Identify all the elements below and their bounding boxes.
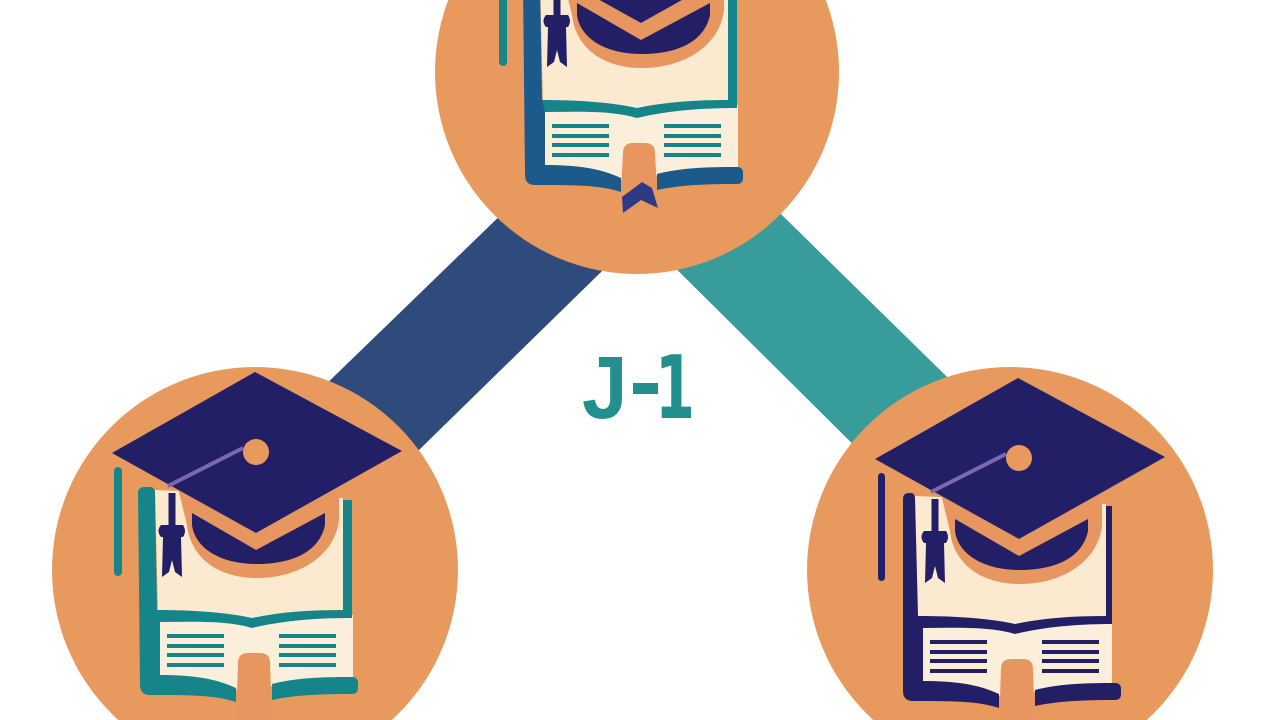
icon: open book — [523, 0, 743, 192]
icon: bookmark ribbon — [621, 143, 658, 213]
icon: side stroke — [878, 473, 885, 581]
icon: graduation cap — [497, 0, 787, 68]
icon: open book — [138, 487, 358, 702]
node: top circle with book and cap icon — [435, 0, 839, 274]
icon: bookmark ribbon — [236, 653, 272, 720]
node: left circle with book and cap icon — [52, 367, 458, 720]
icon: side stroke — [114, 467, 122, 576]
node: right circle with book and cap icon — [807, 367, 1213, 720]
connector: blue band to left circle — [287, 175, 642, 491]
icon: side stroke — [499, 0, 507, 66]
icon: open book — [903, 493, 1121, 708]
icon: graduation cap — [112, 372, 402, 578]
icon: graduation cap — [875, 378, 1165, 584]
icon: bookmark ribbon — [999, 659, 1035, 720]
label: J-1: 1 — [655, 339, 695, 439]
connector: teal band to right circle — [638, 172, 990, 486]
label: J-1: J — [582, 339, 628, 438]
label: J-1 — [582, 339, 695, 439]
